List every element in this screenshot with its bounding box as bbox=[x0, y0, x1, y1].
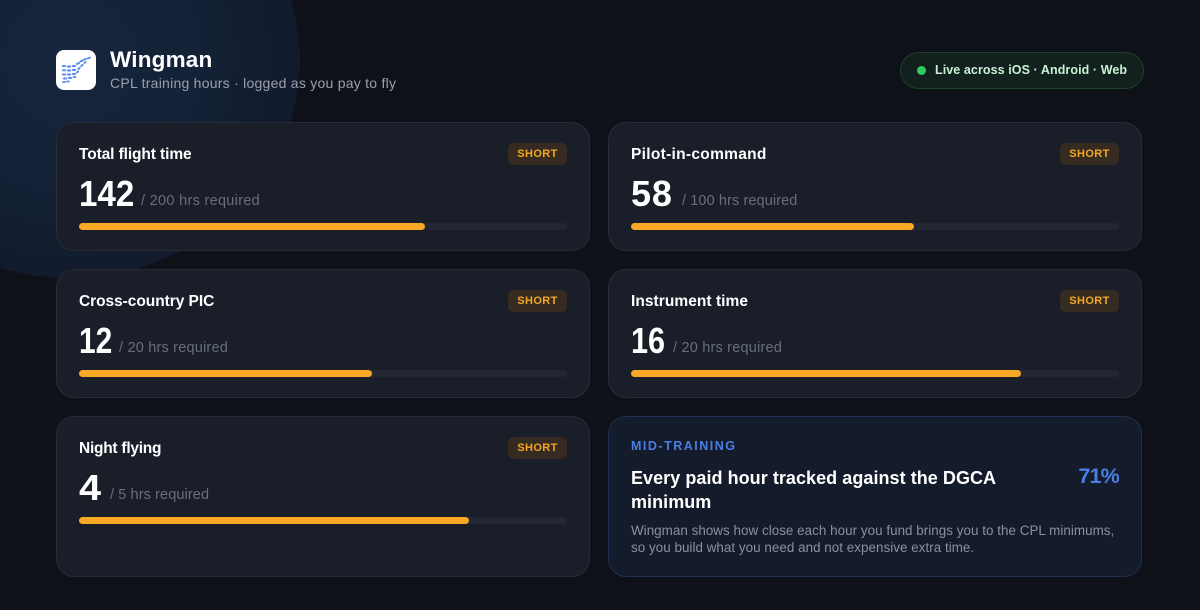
progress bar bbox=[79, 223, 567, 230]
value: 16 bbox=[631, 320, 665, 361]
panel: pilot-in-command bbox=[608, 122, 1142, 251]
status text: Live across iOS · Android · Web bbox=[935, 63, 1127, 77]
value: 12 bbox=[79, 320, 112, 361]
label: Pilot-in-command bbox=[631, 146, 767, 163]
value: 58 bbox=[631, 173, 673, 214]
description bbox=[631, 523, 1114, 555]
badge: SHORT bbox=[517, 295, 558, 307]
badge bbox=[508, 143, 567, 165]
panel: cross-country PIC bbox=[56, 269, 590, 398]
requirement: / 20 hrs required bbox=[673, 340, 782, 356]
icon: green status dot bbox=[917, 66, 926, 75]
badge: SHORT bbox=[517, 442, 558, 454]
panel: night flying bbox=[56, 416, 590, 577]
panel: mid-training summary bbox=[608, 416, 1142, 577]
status pill bbox=[900, 52, 1144, 89]
panel: total flight time bbox=[56, 122, 590, 251]
percentage: 71% bbox=[1078, 464, 1119, 488]
badge bbox=[1060, 143, 1119, 165]
description: Wingman shows how close each hour you fund brings you to the CPL minimums, bbox=[631, 523, 1114, 538]
requirement: / 5 hrs required bbox=[110, 487, 209, 503]
subtitle: CPL training hours · logged as you pay to fly bbox=[110, 75, 396, 91]
label: Instrument time bbox=[631, 293, 748, 310]
requirement: / 100 hrs required bbox=[682, 193, 797, 209]
value: 4 bbox=[79, 467, 101, 508]
badge: SHORT bbox=[517, 148, 558, 160]
label: Total flight time bbox=[79, 146, 192, 163]
badge: SHORT bbox=[1069, 295, 1110, 307]
progress bar bbox=[79, 370, 567, 377]
panel: instrument time bbox=[608, 269, 1142, 398]
badge: SHORT bbox=[1069, 148, 1110, 160]
progress bar bbox=[631, 223, 1119, 230]
icon: wingman logo bbox=[56, 50, 96, 90]
background glow bbox=[0, 0, 300, 278]
headline: minimum bbox=[631, 492, 711, 512]
progress bar bbox=[79, 517, 567, 524]
badge bbox=[508, 290, 567, 312]
eyebrow: MID-TRAINING bbox=[631, 439, 736, 453]
label: Night flying bbox=[79, 440, 161, 457]
requirement: / 200 hrs required bbox=[141, 193, 260, 209]
progress bar bbox=[631, 370, 1119, 377]
header: brand bbox=[56, 47, 396, 91]
value: 142 bbox=[79, 173, 134, 214]
requirement: / 20 hrs required bbox=[119, 340, 228, 356]
badge bbox=[508, 437, 567, 459]
headline bbox=[631, 468, 996, 512]
title: Wingman bbox=[110, 47, 212, 72]
label: Cross-country PIC bbox=[79, 293, 214, 310]
badge bbox=[1060, 290, 1119, 312]
headline: Every paid hour tracked against the DGCA bbox=[631, 468, 996, 488]
description: so you build what you need and not expensive extra time. bbox=[631, 540, 974, 555]
